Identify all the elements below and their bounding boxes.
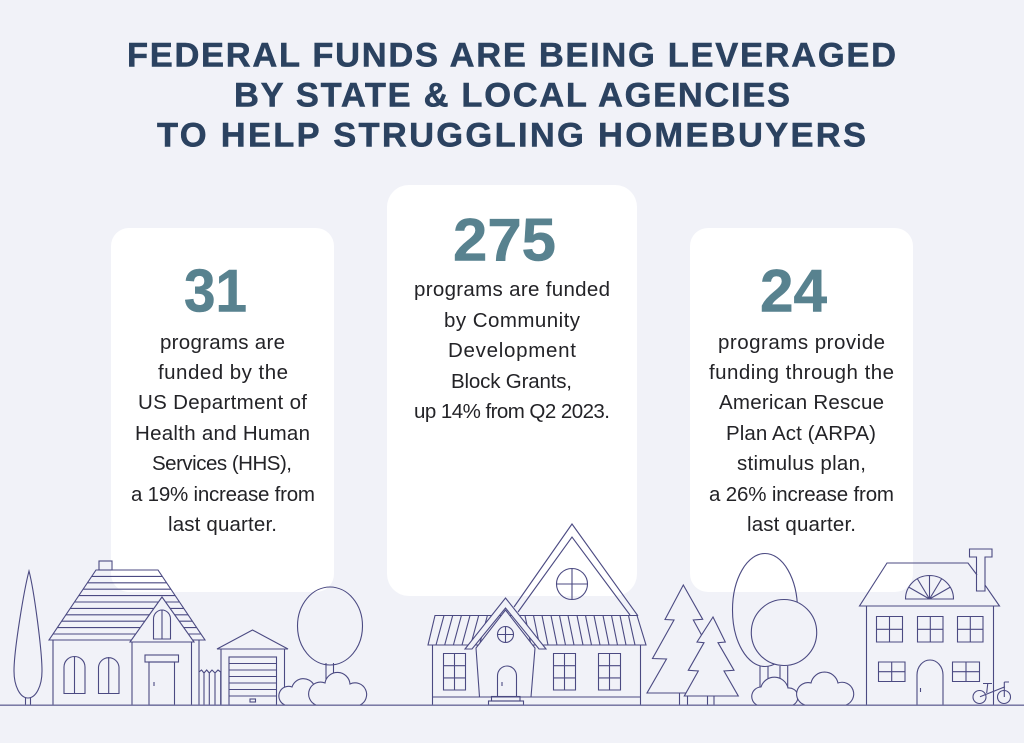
text: CDBG description: by Community: [444, 309, 581, 332]
text: ARPA description: funding through the: [709, 361, 894, 384]
icon: bicycle: [973, 682, 1010, 704]
text: CDBG description: Development: [448, 339, 576, 362]
text: CDBG description: [414, 278, 610, 423]
icon: oval and round trees with bushes: [732, 554, 854, 705]
text: ARPA description: Plan Act (ARPA): [726, 422, 876, 445]
icon: left house: [49, 561, 221, 705]
text: CDBG description: programs are funded: [414, 278, 610, 301]
title: BY STATE & LOCAL AGENCIES: [234, 76, 790, 114]
text: HHS description: funded by the: [158, 361, 288, 384]
text: ARPA description: programs provide: [718, 331, 885, 354]
number: 24: 24: [760, 258, 828, 324]
panel: ARPA programs: [690, 228, 913, 592]
number: 31: 31: [184, 258, 247, 324]
icon: right house: [860, 549, 1000, 705]
icon: round tree and bushes: [279, 587, 367, 705]
text: HHS description: Health and Human: [135, 422, 310, 445]
text: HHS description: last quarter.: [168, 513, 277, 536]
icon: cypress tree: [14, 571, 42, 705]
text: HHS description: [131, 331, 315, 536]
title: TO HELP STRUGGLING HOMEBUYERS: [157, 116, 866, 154]
title: [127, 36, 896, 154]
icon: pine trees: [647, 585, 738, 705]
text: HHS description: US Department of: [138, 391, 307, 414]
text: ARPA description: last quarter.: [747, 513, 856, 536]
number: 275: 275: [453, 206, 556, 274]
icon: garage: [217, 630, 288, 705]
panel: CDBG programs: [387, 185, 637, 596]
ground line: [0, 704, 1024, 706]
text: HHS description: programs are: [160, 331, 285, 354]
icon: centre house: [428, 524, 646, 705]
title: FEDERAL FUNDS ARE BEING LEVERAGED: [127, 36, 896, 74]
text: ARPA description: stimulus plan,: [737, 452, 866, 475]
text: ARPA description: [709, 331, 894, 536]
text: CDBG description: Block Grants,: [451, 370, 572, 393]
text: ARPA description: a 26% increase from: [709, 483, 894, 506]
text: HHS description: a 19% increase from: [131, 483, 315, 506]
text: ARPA description: American Rescue: [719, 391, 884, 414]
panel: HHS programs: [111, 228, 334, 592]
text: CDBG description: up 14% from Q2 2023.: [414, 400, 610, 423]
text: HHS description: Services (HHS),: [152, 452, 292, 475]
